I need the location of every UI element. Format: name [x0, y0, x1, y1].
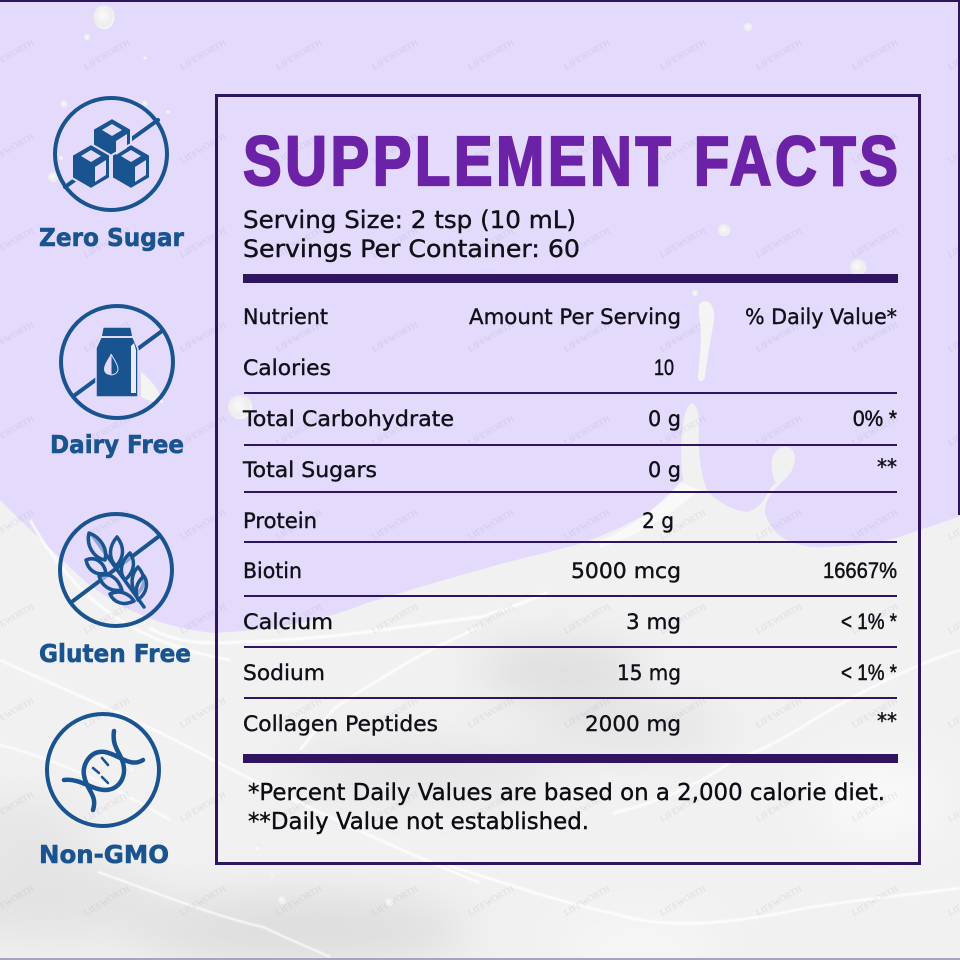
label: Dairy Free: [50, 430, 184, 459]
table header row: Amount Per Serving: [469, 305, 681, 330]
table header row: % Daily Value*: [745, 305, 897, 330]
bottom thick divider: [243, 754, 898, 763]
row: collagen peptides: 2000 mg: [585, 712, 681, 737]
row: total carbohydrate: Total Carbohydrate: [242, 407, 454, 432]
badge: dairy free: [50, 306, 184, 459]
icon: dna in circle: [47, 714, 159, 826]
label: Zero Sugar: [39, 223, 185, 252]
row: total sugars: [242, 455, 897, 483]
row: calories: [243, 355, 674, 381]
panel: supplement facts: [216, 96, 920, 864]
row: biotin: Biotin: [243, 559, 302, 584]
row: protein: [243, 509, 674, 534]
row: total sugars: 0 g: [648, 458, 681, 483]
icon: crossed-out milk carton: [61, 306, 173, 418]
background: milk splash and waves: [0, 403, 960, 960]
row: total sugars: **: [877, 455, 897, 480]
row: biotin: [243, 558, 897, 584]
badge: non-gmo: [39, 714, 169, 869]
row: calcium: 3 mg: [626, 610, 681, 635]
title: SUPPLEMENT FACTS: [243, 122, 898, 200]
table dividers: [244, 392, 897, 699]
badge: zero sugar: [39, 98, 185, 252]
footnotes: **Daily Value not established.: [248, 809, 589, 835]
footnotes: [248, 780, 885, 835]
row: calcium: [243, 609, 897, 635]
icon: crossed-out wheat: [60, 514, 172, 626]
row: protein: Protein: [243, 509, 317, 534]
row: sodium: 15 mg: [617, 661, 681, 686]
label: Non-GMO: [39, 840, 169, 869]
row: sodium: [243, 660, 897, 686]
row: total carbohydrate: [242, 406, 897, 432]
icon: crossed-out sugar cubes: [55, 98, 167, 210]
row: total carbohydrate: 0 g: [648, 407, 681, 432]
table header row: Nutrient: [243, 305, 328, 330]
top thick divider: [243, 274, 898, 283]
serving information: Servings Per Container: 60: [243, 235, 580, 263]
row: calories: Calories: [243, 356, 331, 381]
row: collagen peptides: Collagen Peptides: [243, 712, 438, 737]
row: sodium: Sodium: [243, 661, 325, 686]
serving information: Serving Size: 2 tsp (10 mL): [243, 206, 576, 234]
footnotes: *Percent Daily Values are based on a 2,000 calorie diet.: [248, 780, 885, 806]
badge: gluten free: [39, 514, 191, 668]
background: milk droplets: [48, 5, 866, 906]
row: total carbohydrate: 0% *: [853, 406, 897, 431]
row: collagen peptides: **: [877, 709, 897, 734]
table header row: [243, 305, 897, 330]
serving information: [243, 206, 580, 263]
row: biotin: 16667%: [823, 558, 897, 583]
row: total sugars: Total Sugars: [242, 458, 377, 483]
row: calcium: < 1% *: [841, 609, 897, 634]
row: sodium: < 1% *: [841, 660, 897, 685]
row: calories: 10: [654, 355, 674, 380]
row: collagen peptides: [243, 709, 897, 737]
row: protein: 2 g: [642, 509, 674, 534]
row: calcium: Calcium: [243, 610, 333, 635]
label: Gluten Free: [39, 639, 191, 668]
row: biotin: 5000 mcg: [571, 559, 681, 584]
